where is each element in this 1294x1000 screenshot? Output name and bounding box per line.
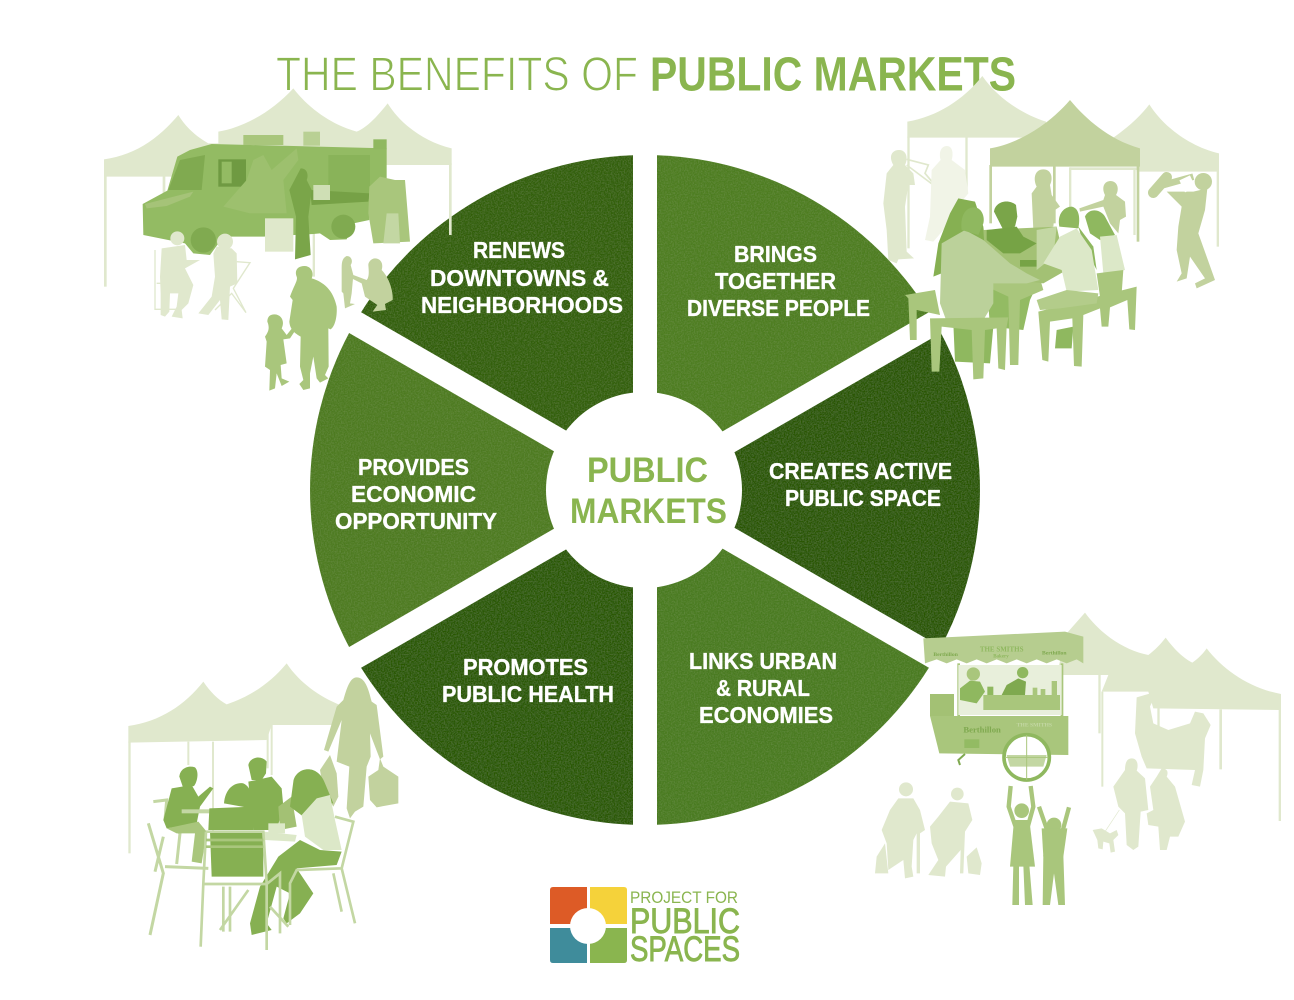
bakery cart: Bakery xyxy=(993,654,1009,659)
title: THE BENEFITS OF xyxy=(276,48,638,102)
wedge: brings together diverse people xyxy=(657,155,929,469)
logo wordmark: SPACES xyxy=(630,930,740,969)
tents xyxy=(128,663,340,853)
illustration: bakery cart scene xyxy=(875,613,1281,905)
food truck xyxy=(143,132,410,259)
wedge: links urban and rural economies: ECONOMIES xyxy=(699,702,833,728)
wedge: renews downtowns and neighborhoods: NEIGHBORHOODS xyxy=(421,292,623,318)
centre hub: public markets: MARKETS xyxy=(570,492,727,531)
tents xyxy=(1057,613,1281,821)
wedge: promotes public health: PUBLIC HEALTH xyxy=(442,681,614,707)
wedge: links urban and rural economies: & RURAL xyxy=(716,675,810,701)
title xyxy=(276,48,1016,102)
centre hub: public markets xyxy=(546,392,742,588)
cafe diners xyxy=(148,758,355,950)
wedge: provides economic opportunity xyxy=(310,333,621,647)
wedge: brings together diverse people: TOGETHER xyxy=(715,268,836,294)
logo wordmark xyxy=(630,888,740,969)
logo wordmark: PROJECT FOR xyxy=(630,888,738,907)
wedge: links urban and rural economies xyxy=(657,511,929,825)
saxophone player xyxy=(1153,173,1215,288)
wedge: creates active public space xyxy=(669,333,980,647)
wedge: renews downtowns and neighborhoods: DOWNTOWNS & xyxy=(430,265,609,291)
children reaching up xyxy=(1009,786,1069,905)
wedge: links urban and rural economies: LINKS URBAN xyxy=(689,648,837,674)
wheel diagram xyxy=(310,155,980,825)
wedge: creates active public space: PUBLIC SPACE xyxy=(785,485,941,511)
wedge: renews downtowns and neighborhoods xyxy=(361,155,633,469)
wedge: promotes public health xyxy=(361,511,633,825)
logo: project for public spaces xyxy=(550,887,740,969)
wedge: creates active public space: CREATES ACTIVE xyxy=(769,458,952,484)
vendor and customer silhouettes xyxy=(1093,692,1211,853)
bakery cart xyxy=(923,632,1083,780)
logo mark xyxy=(550,887,627,963)
picnic table and diners xyxy=(905,198,1137,379)
family xyxy=(265,256,393,391)
standing people xyxy=(1032,169,1126,233)
logo wordmark: PUBLIC xyxy=(630,902,740,941)
seated people xyxy=(155,231,250,320)
wedge: provides economic opportunity: OPPORTUNITY xyxy=(335,508,497,534)
woman with shopping bags xyxy=(320,677,398,818)
wedge: renews downtowns and neighborhoods: RENEWS xyxy=(473,237,565,263)
tents xyxy=(104,88,452,287)
background musicians xyxy=(883,146,968,263)
tents xyxy=(907,76,1219,248)
wedge: brings together diverse people: DIVERSE PEOPLE xyxy=(687,295,870,321)
wedge: brings together diverse people: BRINGS xyxy=(734,241,817,267)
wedge: promotes public health: PROMOTES xyxy=(463,654,588,680)
bakery cart: Berthillon xyxy=(933,652,959,658)
illustration: communal table scene xyxy=(883,76,1219,379)
wedge: provides economic opportunity: ECONOMIC xyxy=(351,481,476,507)
seated couple xyxy=(875,782,982,878)
illustration: food truck scene xyxy=(104,88,452,391)
title: PUBLIC MARKETS xyxy=(650,48,1016,102)
illustration: cafe table scene xyxy=(128,663,398,950)
bakery cart: THE SMITHS xyxy=(980,645,1024,653)
central tent xyxy=(989,100,1140,242)
bakery cart: Berthillon xyxy=(963,724,1001,734)
bakery cart: THE SMITHS xyxy=(1017,723,1052,729)
wedge: provides economic opportunity: PROVIDES xyxy=(358,454,469,480)
bakery cart: Berthillon xyxy=(1042,651,1067,657)
centre hub: public markets: PUBLIC xyxy=(587,451,708,490)
